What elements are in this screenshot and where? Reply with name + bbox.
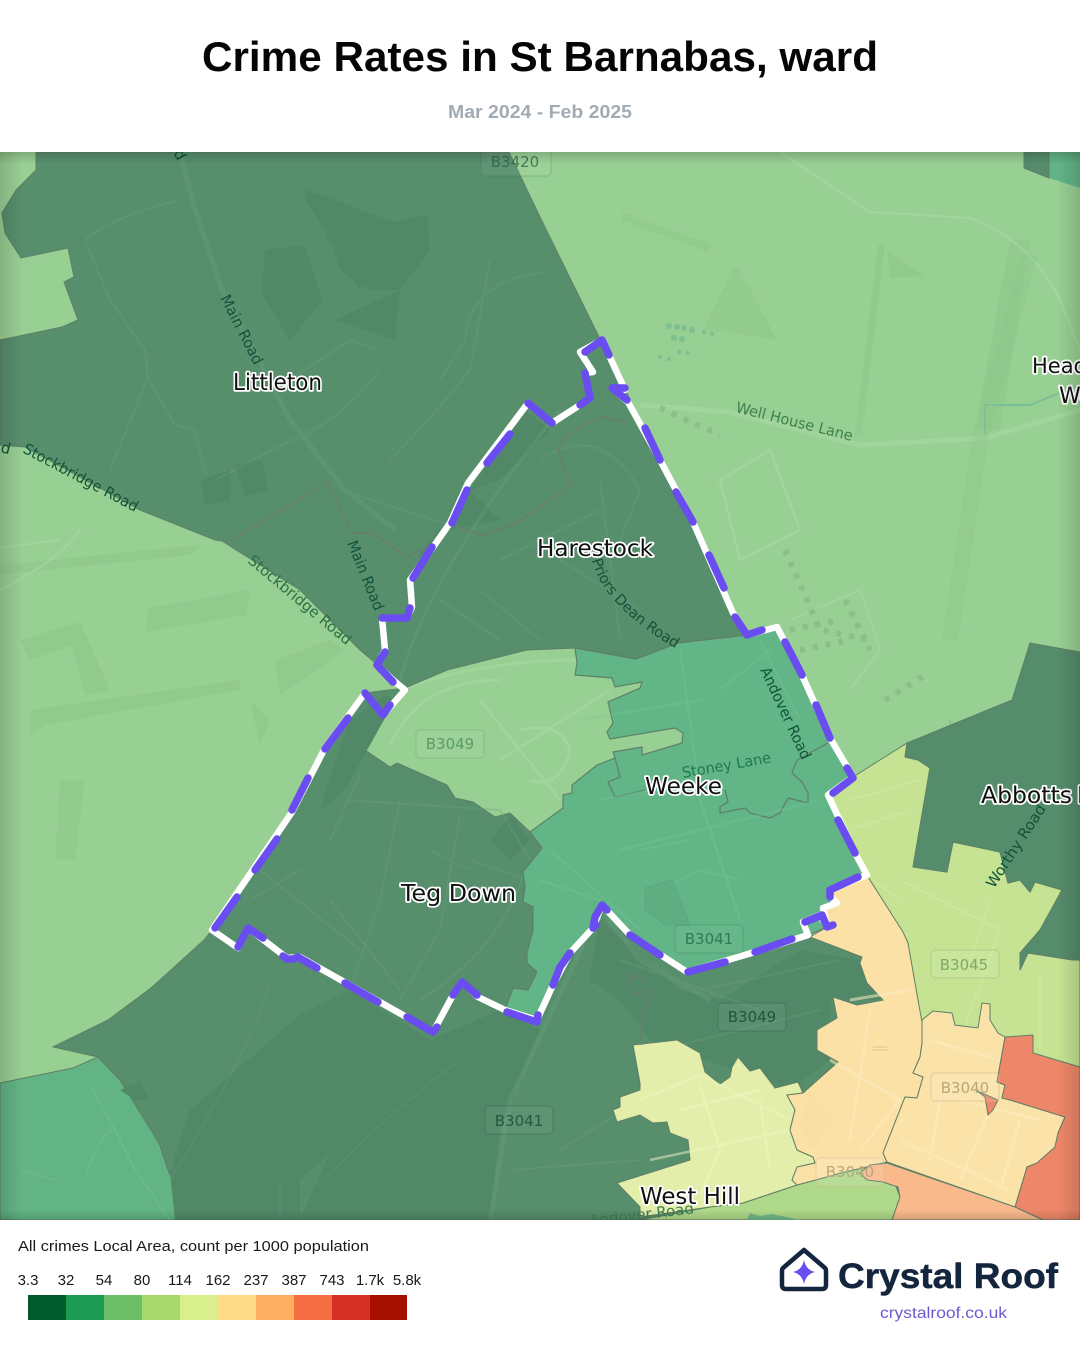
legend scale values: 743 xyxy=(319,1272,345,1289)
road labels: Stockbridge Road xyxy=(244,551,356,649)
road shield: B3049 south xyxy=(718,1003,786,1031)
legend scale values: 237 xyxy=(243,1272,269,1289)
road labels: Worthy Road xyxy=(982,801,1050,891)
road labels: Stoney Lane xyxy=(681,749,772,782)
road shield: B3045: B3045 xyxy=(940,956,988,974)
light green roads xyxy=(0,152,1080,800)
road labels: Andover Road xyxy=(588,1199,695,1230)
road shield: B3049 south: B3049 xyxy=(728,1008,776,1026)
area: Abbotts Barton dark green xyxy=(905,643,1080,970)
area: Littleton and Harestock dark green xyxy=(0,152,747,688)
road shield: B3041 south: B3041 xyxy=(495,1112,543,1130)
mid-green road edges in SW xyxy=(168,1220,170,1221)
legend scale values: 114 xyxy=(168,1272,192,1289)
road shield: B3040 south xyxy=(816,1158,884,1186)
rail corridor xyxy=(950,255,1030,640)
road labels: Andover Road xyxy=(756,664,815,762)
legend scale values: 1.7k xyxy=(356,1272,385,1289)
road shield: B3040 east: B3040 xyxy=(941,1079,989,1097)
dashed paths xyxy=(660,408,925,700)
area: Teg Down and southern dark green xyxy=(53,688,900,1220)
place labels: Abbotts xyxy=(981,783,1072,809)
brand logo xyxy=(782,1250,1058,1322)
road shield: B3040 south: B3040 xyxy=(826,1163,874,1181)
place labels: Littleton xyxy=(233,370,322,396)
title: Crime Rates in St Barnabas, ward xyxy=(202,33,878,80)
map edge shading xyxy=(0,152,1080,1220)
area: south-west mid green xyxy=(0,1057,175,1220)
ward boundary: purple dashes xyxy=(215,340,858,1032)
brand name: Crystal Roof xyxy=(838,1257,1058,1296)
legend colour bar xyxy=(28,1295,407,1320)
sub-features on light green farmland xyxy=(0,212,1030,860)
ward boundary: white line xyxy=(212,340,867,1032)
place labels: Harestock xyxy=(537,536,654,562)
water line xyxy=(985,385,1080,435)
area: top-right corner xyxy=(1024,152,1080,188)
legend scale values: 162 xyxy=(205,1272,231,1289)
road shield: B3420: B3420 xyxy=(491,153,539,171)
road labels: Well House Lane xyxy=(734,398,855,445)
darker patches in dark green xyxy=(120,718,513,1220)
dark green roads xyxy=(482,720,952,1220)
legend scale values: 32 xyxy=(58,1272,74,1289)
legend scale values: 54 xyxy=(96,1272,112,1289)
legend scale values: 387 xyxy=(281,1272,307,1289)
area: small mid-green patches at bottom xyxy=(747,1213,800,1220)
road labels: Stockbridge Road xyxy=(20,440,142,516)
internal ward boundaries in dark area xyxy=(230,417,650,1045)
area: West Hill pale yellow xyxy=(613,1040,815,1217)
road labels: Main Road xyxy=(216,292,267,368)
area: south-east red-orange xyxy=(997,1035,1080,1220)
icon: house with star xyxy=(782,1250,826,1289)
subtitle: date range: Mar 2024 - Feb 2025 xyxy=(448,101,632,122)
legend scale values: 3.3 xyxy=(18,1272,38,1289)
legend xyxy=(18,1238,422,1320)
legend title: All crimes Local Area, count per 1000 population xyxy=(18,1238,369,1255)
brand url: crystalroof.co.uk xyxy=(880,1305,1008,1322)
area: south orange xyxy=(860,1163,1043,1220)
road shield: B3041 Weeke: B3041 xyxy=(685,930,733,948)
legend scale values xyxy=(18,1272,422,1289)
road labels: Main Road xyxy=(343,538,388,613)
area: Weeke mid green xyxy=(505,627,867,1020)
road shield: B3049 west: B3049 xyxy=(426,735,474,753)
road shield: B3420 xyxy=(480,152,552,176)
road shield: B3041 south xyxy=(485,1106,553,1134)
road shield: B3040 east xyxy=(931,1073,999,1101)
area: east yellow-green xyxy=(828,743,1080,1075)
area: central cream xyxy=(787,877,923,1185)
legend scale values: 5.8k xyxy=(393,1272,422,1289)
tree clusters xyxy=(658,323,714,361)
Weeke inner boundaries and roads xyxy=(580,714,828,926)
place labels xyxy=(233,354,1080,1210)
road labels: Road xyxy=(156,121,190,163)
place labels: West Hill xyxy=(640,1184,740,1210)
place labels: Teg Down xyxy=(400,881,516,907)
road shield: B3041 Weeke xyxy=(675,925,743,953)
area: eastern cream xyxy=(883,1003,1065,1207)
road shield: B3049 west xyxy=(416,730,484,758)
area: bottom light yellow-green xyxy=(640,1163,900,1220)
road labels: Priors Dean Road xyxy=(592,558,680,648)
road shield: B3045 xyxy=(931,950,999,978)
place labels: Weeke xyxy=(645,774,722,800)
road labels xyxy=(2,152,1046,1220)
legend scale values: 80 xyxy=(134,1272,150,1289)
